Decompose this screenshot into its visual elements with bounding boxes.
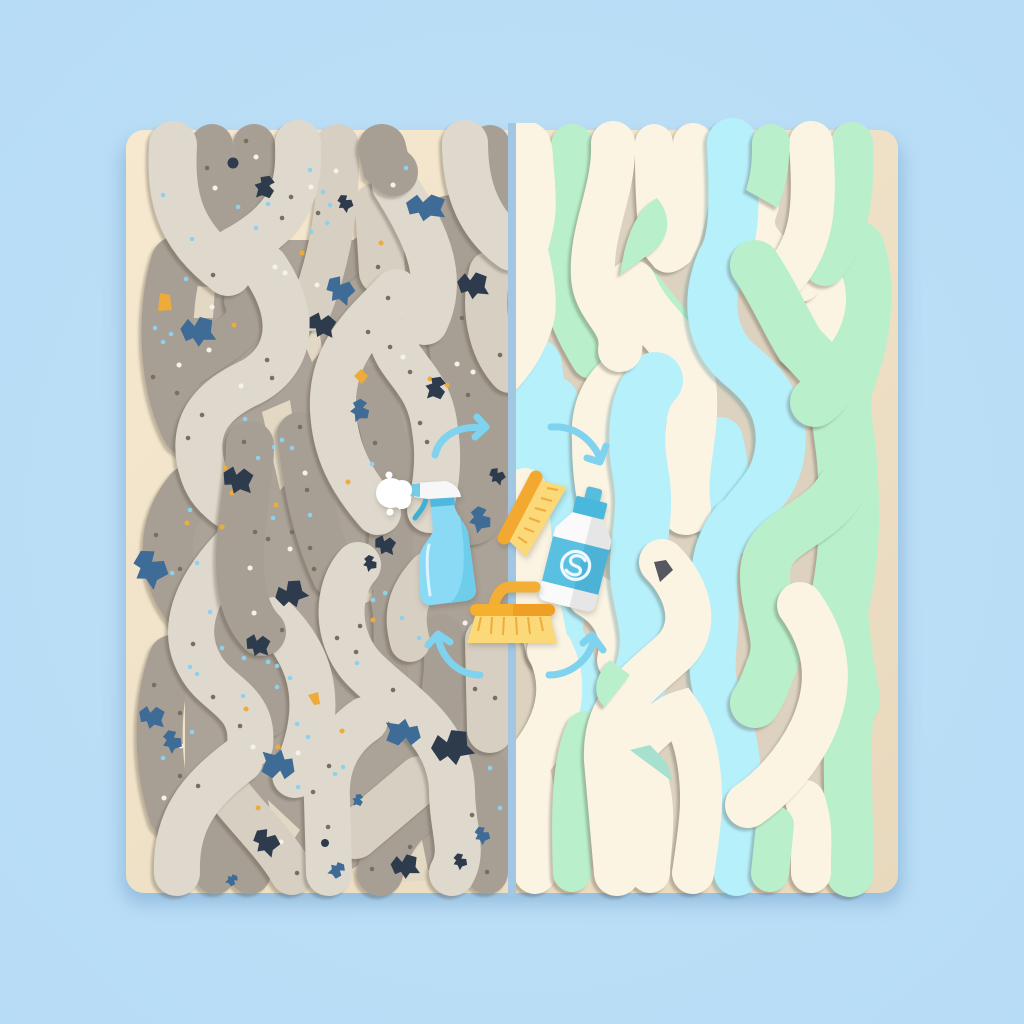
trigger — [415, 499, 426, 518]
cream front strands — [593, 143, 825, 873]
orange shards — [158, 293, 368, 705]
arrows: cleaning cycle — [428, 417, 606, 675]
label swirl — [559, 548, 593, 582]
clean gap base — [516, 150, 850, 870]
blue main strands — [637, 143, 781, 873]
blue strands, back layer — [535, 365, 725, 722]
panel: dirty fibres (left) — [125, 141, 512, 888]
arrow: top left — [435, 417, 486, 455]
tan gap slivers — [188, 285, 430, 885]
label — [542, 536, 609, 595]
orange specks — [187, 243, 447, 808]
grey specks — [153, 141, 500, 873]
weave gap triangle — [630, 745, 673, 782]
centre divider — [508, 123, 516, 896]
spray puff — [376, 472, 412, 516]
dark strands over light — [240, 148, 394, 632]
arrow: bottom right — [549, 635, 603, 675]
debris: large shards — [125, 158, 508, 888]
cap — [584, 486, 603, 503]
dark dirty strands, lower layer — [160, 145, 490, 873]
spray head — [414, 481, 461, 499]
white specks — [164, 157, 473, 842]
body — [537, 509, 616, 613]
panel shadow — [122, 140, 902, 904]
green strands, back layer — [564, 145, 862, 873]
dirty gap base — [185, 240, 508, 870]
leftover dirt shard — [654, 560, 673, 582]
blue shards — [125, 192, 495, 888]
cream weave strands — [525, 205, 800, 873]
navy shards — [222, 158, 508, 882]
light strands, lower layer — [230, 145, 510, 873]
panel: clean fibres (right) — [516, 123, 862, 873]
light dirty strands, upper layer — [173, 143, 512, 873]
sky blue specks — [155, 168, 500, 808]
arrow: bottom left — [428, 634, 480, 675]
icon: spray bottle — [376, 472, 476, 605]
icon: detergent bottle — [537, 481, 623, 613]
cream strands, back layer — [516, 123, 826, 873]
arrow: top right — [551, 427, 606, 462]
bottle body — [419, 500, 476, 605]
green leaf strands — [596, 124, 828, 707]
carpet backing card — [126, 130, 898, 893]
icon: tilted scrub brush — [504, 477, 567, 557]
debris: specks — [153, 141, 500, 873]
collar — [430, 497, 455, 507]
green strands, front layer — [571, 143, 853, 873]
icon: upright scrub brush — [467, 587, 557, 643]
